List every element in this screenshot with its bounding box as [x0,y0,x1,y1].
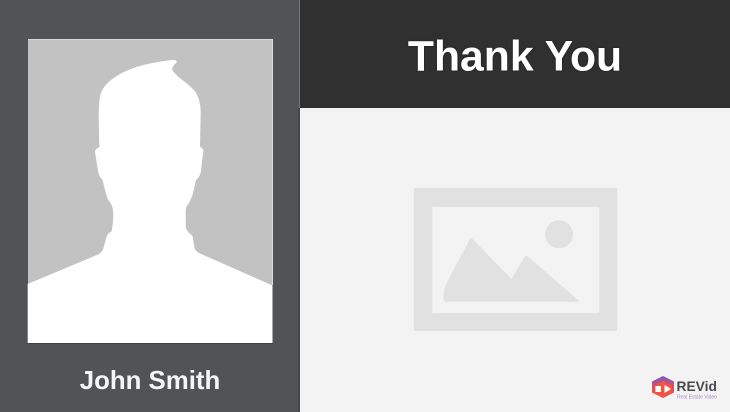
logo wordmark: REVid [676,379,717,394]
picture frame [414,188,617,331]
icon: person silhouette [28,60,273,343]
title: Thank You [408,32,622,80]
icon: image placeholder [414,188,617,331]
icon: logo hexagon [652,376,674,398]
logo: REVid [652,376,717,400]
panel: header band [300,0,730,108]
panel: right background [300,0,730,412]
logo tagline: Real Estate Video [677,394,717,400]
sun [545,220,573,248]
photo placeholder [28,39,273,344]
name label: John Smith [80,367,220,395]
photo background [28,39,272,343]
mountains [443,238,579,302]
panel: left profile [0,0,300,412]
